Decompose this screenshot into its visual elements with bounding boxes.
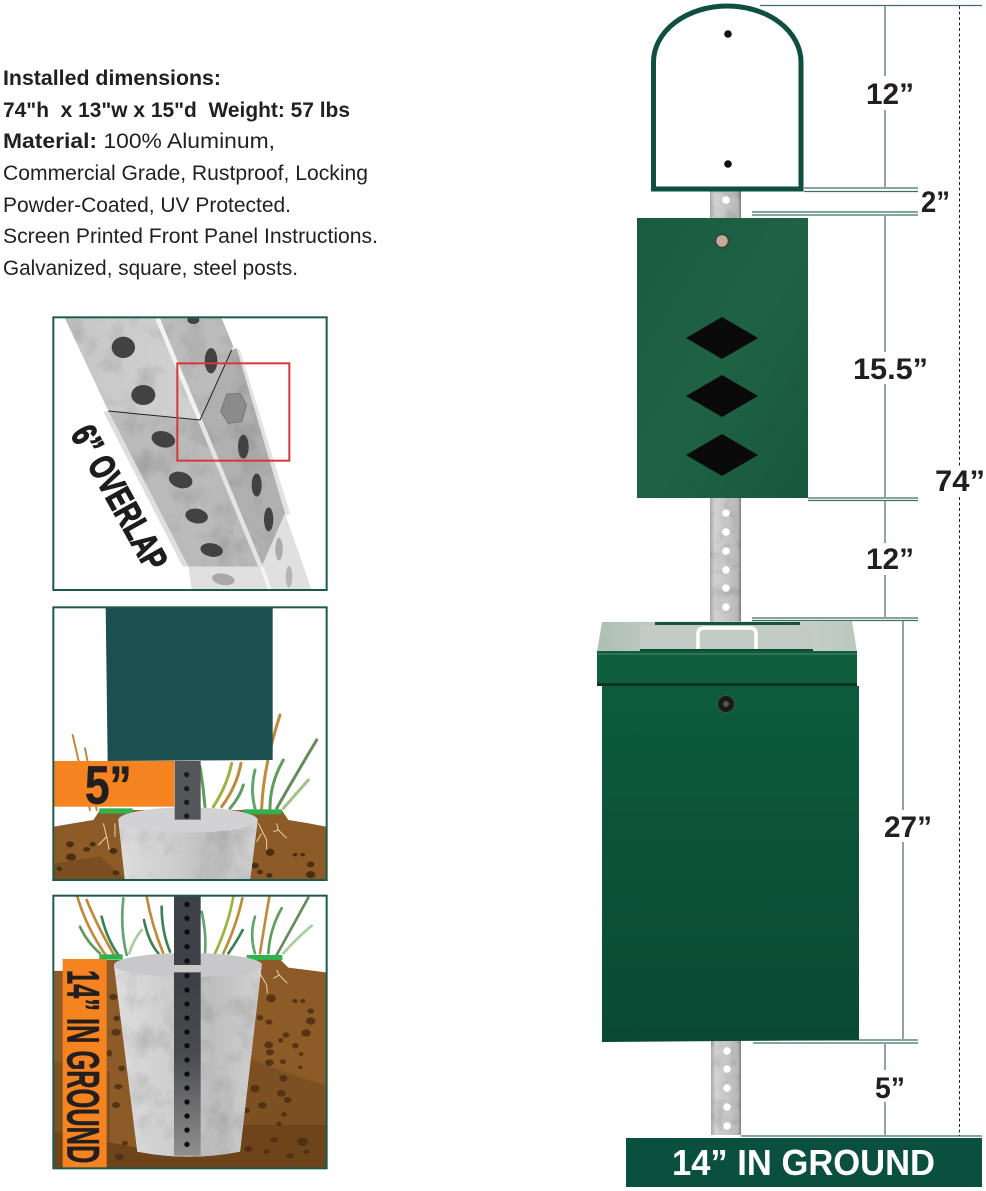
dimension lines (741, 6, 982, 1136)
panel: 14 inch in ground (53, 896, 327, 1169)
text block: installed dimensions and materials: 74"h x 13"w x 15"d Weight: 57 lbs (3, 99, 350, 122)
text block: installed dimensions and materials: Installed dimensions: (3, 67, 221, 90)
dimension labels: 12” (866, 543, 914, 576)
post above concrete (174, 896, 201, 965)
dimension labels: 15.5” (853, 353, 928, 386)
text block: installed dimensions and materials: Material: 100% Aluminum, (3, 130, 275, 153)
icon: lock bolt (716, 234, 728, 248)
in-ground banner (626, 1138, 982, 1187)
label: 5 inches: 5” (85, 756, 132, 816)
grass (77, 897, 312, 957)
in-ground banner: 14” IN GROUND (672, 1142, 935, 1183)
dimension labels: 12” (866, 78, 914, 111)
dimension labels (853, 78, 985, 1105)
roots (260, 970, 287, 993)
post holes (184, 902, 190, 1147)
dimension labels: 5” (875, 1072, 905, 1105)
diamond openings (686, 317, 758, 476)
soil (54, 810, 326, 880)
orange callout (54, 761, 174, 807)
concrete footing (118, 820, 258, 881)
green turf (99, 954, 123, 960)
green turf (99, 808, 133, 814)
soil stones (107, 994, 315, 1160)
post embedded in concrete (174, 972, 201, 1156)
text block: installed dimensions and materials: Screen Printed Front Panel Instructions. (3, 225, 378, 248)
concrete footing (114, 965, 262, 1157)
soil stones (57, 841, 315, 878)
post holes (722, 196, 731, 1130)
red highlight square (177, 363, 289, 461)
text block: installed dimensions and materials: Powder-Coated, UV Protected. (3, 194, 291, 217)
panel: 5 inch above ground (53, 607, 327, 881)
post (175, 761, 201, 820)
icon: white handle (698, 628, 756, 649)
text block: installed dimensions and materials: Galvanized, square, steel posts. (3, 257, 298, 280)
label: 6 inch overlap: 6” OVERLAP (63, 418, 176, 577)
icon: hex bolt (221, 393, 247, 423)
panel border (53, 607, 327, 880)
text block: installed dimensions and materials: Commercial Grade, Rustproof, Locking (3, 162, 368, 185)
panel border (53, 317, 327, 590)
sign back panel (106, 607, 273, 761)
post holes (112, 316, 273, 559)
instruction panel with diamond openings (637, 218, 808, 498)
roots (98, 823, 287, 850)
bin body (602, 686, 859, 1042)
sign post (710, 190, 741, 1135)
icon: key lock (718, 696, 734, 712)
lid front (597, 651, 857, 684)
top topper sign (654, 6, 801, 189)
dimension labels: 27” (884, 811, 932, 844)
panel: 6 inch overlap (53, 316, 327, 590)
grass (73, 715, 317, 810)
orange callout (63, 959, 107, 1169)
dimension labels: 2” (921, 186, 950, 219)
dimension labels: 74” (935, 465, 985, 498)
panel border (53, 896, 327, 1168)
soil (54, 960, 326, 1168)
text block: installed dimensions and materials (3, 67, 378, 280)
waste bin (597, 621, 859, 1042)
lid top (597, 621, 857, 652)
